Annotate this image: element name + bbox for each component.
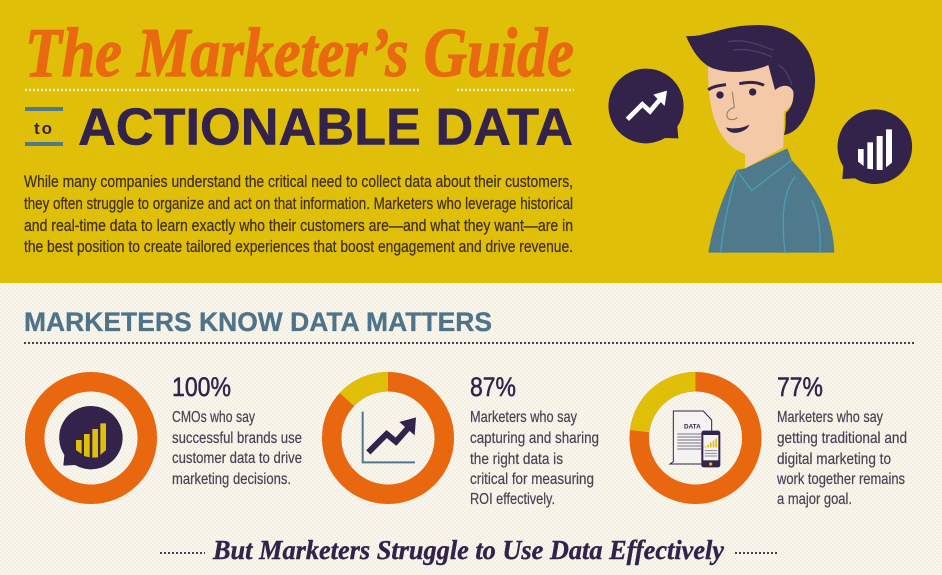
subheading: But Marketers Struggle: But Marketers Struggle to Use Data Effectively — [212, 535, 725, 565]
icon: bar chart bubble — [838, 109, 912, 184]
stat text: CMOs who say — [172, 409, 255, 426]
stat text: getting traditional and — [777, 430, 907, 447]
stat text: 77% — [777, 372, 823, 402]
stat text: customer data to drive — [172, 450, 302, 467]
stat: 77% — [639, 372, 907, 508]
icon: data document and phone: DATA — [684, 424, 701, 431]
stat text: marketing decisions. — [172, 471, 291, 488]
panel: header background — [0, 0, 942, 283]
intro paragraph: they often struggle to organize and act on that information. Marketers who leverage historical — [24, 195, 573, 213]
title: ACTIONABLE DATA: ACTIONABLE DATA — [78, 98, 573, 156]
icon: data document and phone — [670, 411, 720, 467]
stat text: digital marketing to — [777, 451, 891, 468]
stat text — [470, 372, 599, 508]
intro paragraph: and real-time data to learn exactly who their customers are—and what they want—are in — [24, 217, 573, 235]
stat text: critical for measuring — [470, 471, 594, 488]
hair — [686, 25, 815, 135]
donut chart 100% — [35, 382, 147, 494]
stat text — [172, 372, 302, 488]
stat: 100% — [35, 372, 302, 494]
stat text: capturing and sharing — [470, 430, 599, 447]
stat text: Marketers who say — [470, 409, 577, 426]
facial features — [708, 82, 764, 133]
donut chart 77% — [639, 382, 752, 494]
stat text — [776, 372, 907, 508]
stat: 87% — [332, 372, 599, 508]
face — [708, 63, 794, 168]
panel: lower background — [0, 283, 942, 575]
illustration: marketer with speech bubbles — [608, 25, 912, 253]
stat text: successful brands use — [172, 430, 302, 447]
intro paragraph: While many companies understand the critical need to collect data about their customers, — [24, 173, 573, 191]
icon: trend bubble — [608, 69, 684, 143]
stat text: work together remains — [776, 471, 905, 488]
icon: bar chart bubble — [59, 406, 123, 469]
intro paragraph: the best position to create tailored experiences that boost engagement and drive revenue. — [24, 238, 573, 256]
stat text: ROI effectively. — [470, 491, 555, 508]
heading: Marketers Know Data Matters: MARKETERS KNOW DATA MATTERS — [24, 307, 492, 337]
donut chart 87% — [332, 382, 444, 494]
stat text: 100% — [172, 372, 231, 402]
title: to: to — [34, 119, 54, 138]
stat text: 87% — [470, 372, 516, 402]
stat text: Marketers who say — [777, 409, 883, 426]
stat text: a major goal. — [777, 491, 852, 508]
stat text: the right data is — [470, 451, 563, 468]
intro paragraph — [24, 173, 573, 256]
icon: line chart arrow — [363, 412, 416, 462]
shirt — [708, 148, 834, 253]
title: The Marketer's Guide: The Marketer’s Guide — [25, 15, 574, 92]
title: to — [25, 107, 63, 146]
